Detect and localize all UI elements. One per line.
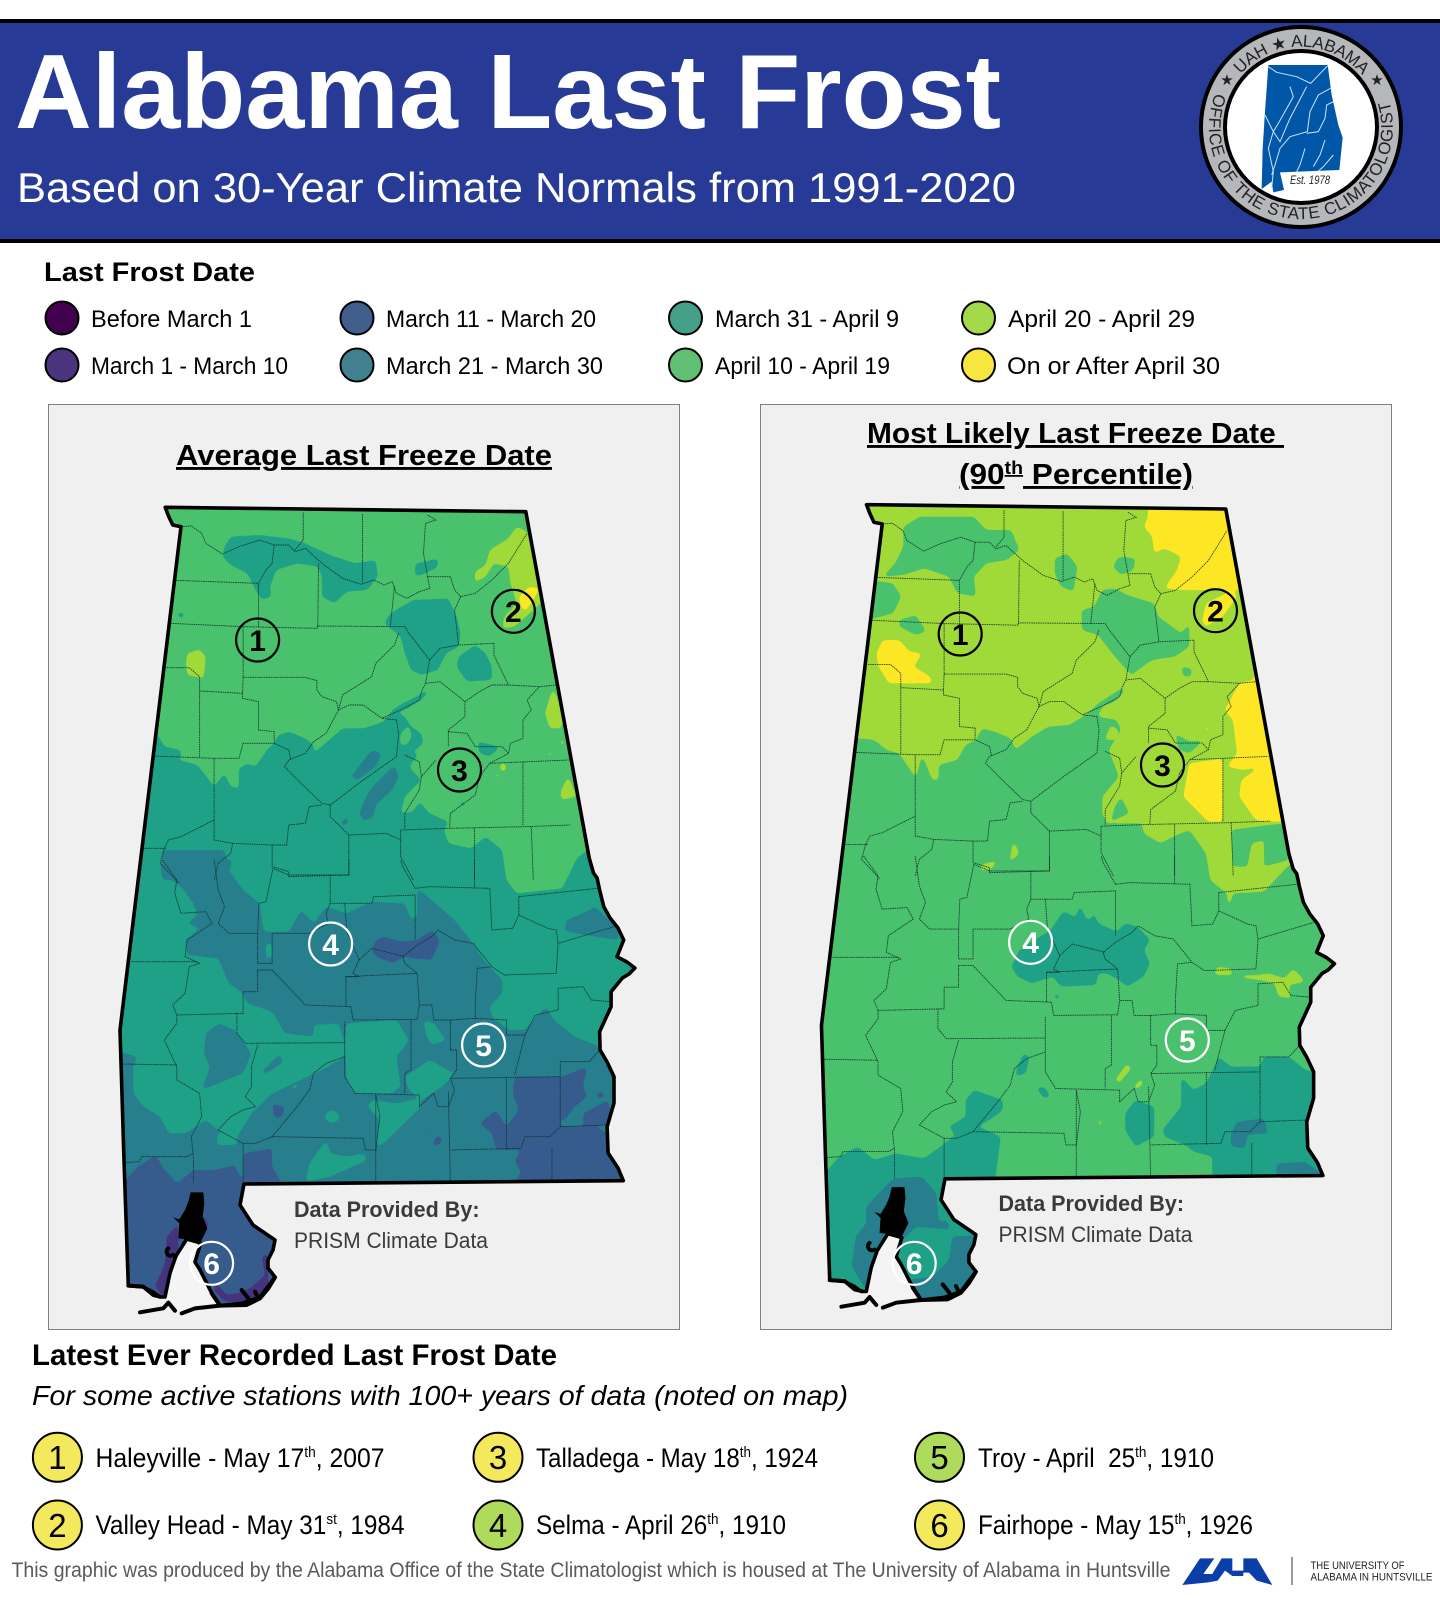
legend item: on or after April 30 [962, 348, 1220, 382]
record 5: Troy: 5 [930, 1439, 949, 1476]
marker 6 [190, 1242, 233, 1285]
teal islands [216, 943, 455, 1182]
state outline and coast [120, 507, 635, 1313]
record 6: Fairhope: 6 [930, 1507, 949, 1544]
legend item: April 20 - April 29 [962, 302, 1195, 334]
record 4: Selma: th [707, 1511, 719, 1528]
record 3: Talladega: Talladega - May 18 [536, 1443, 764, 1473]
county lines [123, 513, 614, 1183]
data credit [998, 1191, 1193, 1247]
legend item: April 10 - April 19 [669, 348, 890, 382]
marker 3 [438, 748, 481, 792]
data credit [294, 1197, 488, 1253]
record 5: Troy: th [1135, 1444, 1146, 1461]
records section: latest ever recorded last frost date [32, 1339, 1253, 1550]
record 2: Valley Head: Valley Head - May 31 [96, 1510, 352, 1540]
record 3: Talladega: th [740, 1444, 751, 1461]
legend item: March 11 - March 20: March 11 - March 20 [386, 306, 596, 333]
dark blue zone [119, 930, 633, 1317]
record 4: Selma: 4 [489, 1507, 507, 1544]
legend: last frost date [44, 257, 1220, 382]
section subheading: For some active stations with 100+ years of data (noted on map) [32, 1380, 848, 1411]
marker 1 [939, 612, 982, 656]
marker 6: 6 [203, 1248, 220, 1281]
record 1: Haleyville: th [304, 1444, 316, 1461]
subtitle: Based on 30-Year Climate Normals from 1991-2020 [17, 164, 1016, 211]
marker 6: 6 [906, 1248, 923, 1281]
marker 1: 1 [952, 619, 969, 652]
state outline and coast [821, 505, 1334, 1308]
record 4: Selma [474, 1500, 786, 1550]
lime zone [186, 527, 577, 800]
record 3: Talladega: 3 [489, 1439, 507, 1476]
yellow zone [876, 510, 1282, 822]
blue-teal zone [119, 750, 629, 1193]
legend heading: Last Frost Date [44, 257, 255, 287]
data credit: PRISM Climate Data [998, 1222, 1193, 1247]
panel heading: Most Likely Last Freeze Date [867, 418, 1284, 450]
legend item: March 21 - March 30 [340, 348, 603, 382]
record 2: Valley Head: 2 [48, 1507, 67, 1544]
green zone [823, 516, 1332, 1176]
panel heading [867, 418, 1284, 491]
header banner [0, 19, 1440, 243]
record 6: Fairhope: th [1174, 1511, 1186, 1528]
record 6: Fairhope: Fairhope - May 15 [978, 1510, 1197, 1540]
logo: Alabama Office of the State Climatologist seal: UAH ★ ALABAMA [1233, 35, 1368, 76]
record 1: Haleyville: Haleyville - May 17 [96, 1443, 324, 1473]
panel heading: Average Last Freeze Date [176, 440, 552, 472]
marker 4: 4 [1022, 927, 1039, 960]
marker 5: 5 [1179, 1025, 1196, 1058]
logo: Alabama Office of the State Climatologist seal: ★ [1220, 72, 1234, 89]
logo: Alabama Office of the State Climatologist seal: OFFICE OF THE STATE CLIMATOLOGIST [1208, 95, 1393, 220]
record 6: Fairhope: , 1926 [1186, 1510, 1253, 1540]
county lines [824, 510, 1314, 1178]
panel: most likely last freeze date [760, 404, 1392, 1330]
marker 5 [462, 1024, 505, 1066]
logo: Alabama Office of the State Climatologist seal: Est. 1978 [1290, 175, 1330, 187]
lime spots [980, 725, 1305, 1130]
blue-teal zone [852, 1118, 1330, 1307]
legend item: March 1 - March 10: March 1 - March 10 [91, 353, 288, 380]
marker 6 [893, 1242, 936, 1285]
logo: Alabama Office of the State Climatologist seal [1199, 25, 1403, 229]
logo: Alabama Office of the State Climatologist seal: ★ [1370, 72, 1384, 89]
legend item: before March 1 [46, 302, 252, 334]
record 3: Talladega [474, 1433, 818, 1482]
record 1: Haleyville: , 2007 [316, 1443, 384, 1473]
legend item: March 31 - April 9: March 31 - April 9 [715, 306, 899, 333]
map: Alabama average last freeze date [118, 506, 637, 1316]
panel heading: Percentile) [1023, 459, 1193, 491]
legend item: before March 1: Before March 1 [91, 306, 252, 333]
record 5: Troy: , 1910 [1146, 1443, 1214, 1473]
record 2: Valley Head: st [326, 1511, 338, 1528]
logo wordmark: THE UNIVERSITY OF [1310, 1560, 1405, 1572]
logo: UAH [1182, 1557, 1432, 1585]
legend item: April 20 - April 29: April 20 - April 29 [1008, 306, 1195, 333]
map: Alabama 90th percentile last freeze date [791, 505, 1372, 1308]
legend item: March 11 - March 20 [340, 302, 596, 334]
data credit: PRISM Climate Data [294, 1228, 488, 1253]
logo divider [1292, 1557, 1293, 1585]
marker 3: 3 [1154, 750, 1171, 783]
marker 2: 2 [505, 596, 522, 629]
legend item: April 10 - April 19: April 10 - April 19 [715, 353, 890, 380]
yellow spot [519, 587, 538, 610]
section heading: Latest Ever Recorded Last Frost Date [32, 1339, 557, 1372]
marker 4 [1009, 921, 1052, 964]
marker 5: 5 [475, 1030, 492, 1063]
marker 2 [492, 590, 535, 633]
legend item: March 21 - March 30: March 21 - March 30 [386, 353, 603, 380]
record 4: Selma: , 1910 [719, 1510, 786, 1540]
record 1: Haleyville: 1 [48, 1439, 67, 1476]
panel heading: th [1005, 458, 1023, 478]
footer credit: This graphic was produced by the Alabama Office of the State Climatologist which is housed at The University of Alabama in Huntsville [12, 1558, 1170, 1582]
marker 3 [1141, 744, 1184, 786]
teal zone [122, 535, 632, 1140]
marker 1: 1 [249, 625, 266, 658]
logo wordmark [1310, 1560, 1432, 1584]
marker 2 [1194, 589, 1237, 632]
marker 2: 2 [1207, 596, 1224, 628]
data credit: Data Provided By: [998, 1191, 1184, 1216]
panel heading: (90 [959, 459, 1001, 491]
legend item: March 1 - March 10 [46, 348, 288, 382]
data credit: Data Provided By: [294, 1197, 480, 1222]
record 2: Valley Head: , 1984 [337, 1510, 404, 1540]
marker 3: 3 [451, 755, 468, 788]
title: Alabama Last Frost [15, 33, 1001, 151]
marker 4: 4 [322, 929, 339, 962]
record 3: Talladega: , 1924 [751, 1443, 818, 1473]
legend item: on or after April 30: On or After April 30 [1007, 353, 1220, 380]
marker 5 [1166, 1018, 1209, 1062]
record 5: Troy: Troy - April 25 [978, 1443, 1153, 1473]
legend item: March 31 - April 9 [669, 302, 899, 334]
teal zone [825, 905, 1339, 1307]
record 2: Valley Head [33, 1500, 405, 1550]
purple coastal zone [155, 1213, 268, 1302]
marker 4 [309, 922, 352, 966]
record 4: Selma: Selma - April 26 [536, 1510, 727, 1540]
record 6: Fairhope [915, 1500, 1253, 1550]
record 1: Haleyville [33, 1433, 385, 1482]
green island [400, 728, 412, 745]
marker 1 [236, 618, 279, 662]
record 5: Troy [915, 1433, 1214, 1482]
panel: average last freeze date [48, 404, 680, 1330]
